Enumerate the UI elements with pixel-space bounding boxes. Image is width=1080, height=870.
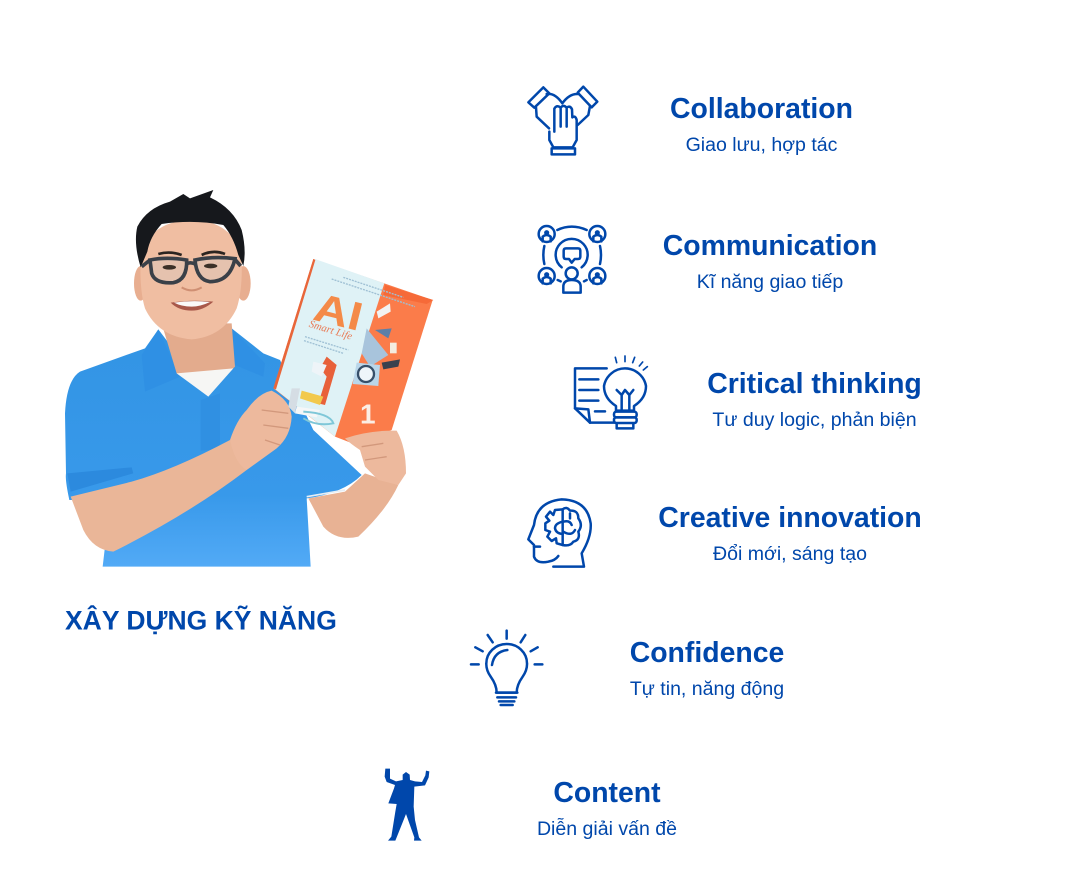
left hand (230, 391, 292, 470)
nose (182, 287, 202, 290)
icon: people talking (539, 226, 605, 293)
hair (136, 190, 245, 267)
sublabel: Collaboration: Giao lưu, hợp tác (686, 134, 838, 156)
sublabel: Critical thinking: Tư duy logic, phản biện (712, 409, 917, 431)
right arm (308, 473, 398, 538)
item: Critical thinking (575, 356, 922, 431)
label: Collaboration: Collaboration (670, 93, 853, 125)
icon: person raising arms (385, 769, 429, 841)
icon: light bulb (471, 631, 542, 705)
item: Confidence (471, 631, 784, 705)
face (140, 220, 242, 339)
undershirt (177, 368, 233, 397)
item: Content (385, 769, 677, 841)
heading: skills: XÂY DỰNG KỸ NĂNG (65, 606, 337, 636)
ears (134, 266, 147, 301)
item: Creative innovation (528, 499, 922, 567)
icon: note and light bulb (575, 356, 647, 428)
eyes and brows (158, 252, 225, 255)
label: Content: Content (553, 777, 661, 809)
glasses (142, 258, 241, 283)
item: Collaboration (528, 87, 853, 156)
book number: 1 (360, 398, 376, 429)
book title: AI (309, 285, 367, 340)
smile (171, 301, 213, 311)
book small text (304, 277, 415, 353)
neck (162, 323, 235, 393)
photo: student holding a book (65, 190, 433, 567)
sublabel: Communication: Kĩ năng giao tiếp (697, 271, 843, 293)
sublabel: Content: Diễn giải vấn đề (537, 817, 677, 840)
book graphics (362, 328, 388, 367)
label: Confidence: Confidence (630, 637, 784, 669)
book: Smart Life (307, 319, 354, 343)
left forearm (71, 440, 247, 552)
icon: joined hands (528, 87, 597, 154)
sublabel: Confidence: Tự tin, năng động (630, 678, 784, 700)
item: Communication (539, 226, 877, 293)
sublabel: Creative innovation: Đổi mới, sáng tạo (713, 543, 867, 565)
icon: head with gear and brain (528, 499, 591, 567)
label: Communication: Communication (663, 230, 877, 262)
label: Critical thinking: Critical thinking (707, 368, 922, 400)
label: Creative innovation: Creative innovation (658, 502, 922, 534)
shirt (65, 328, 362, 567)
book (273, 259, 433, 445)
right hand (345, 431, 406, 485)
